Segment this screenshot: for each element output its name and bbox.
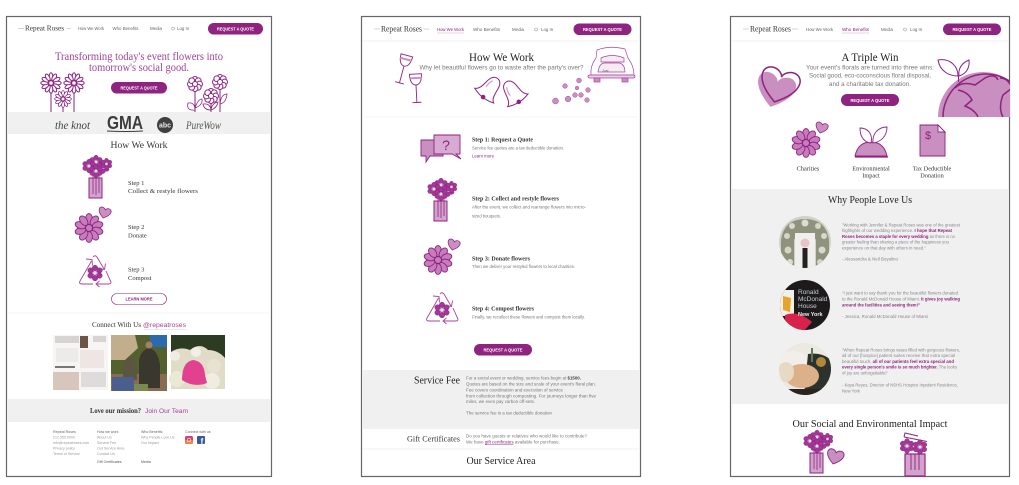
footer links: Service Fee (97, 441, 116, 445)
photo: pink cap on hydrangeas (169, 335, 225, 389)
join our team band: Join Our Team (145, 408, 188, 415)
service fee band: Fee covers coordination and execution of service (466, 388, 564, 392)
step 2 text: Donate (128, 232, 147, 240)
service fee band: Service Fee (414, 374, 460, 386)
step 4 text: Step 4: Compost flowers (472, 306, 535, 312)
testimonial 3: "When Repeat Roses brings vases filled with gorgeous flowers, (842, 348, 960, 352)
navigation bar: Repeat Roses (750, 24, 791, 34)
footer links: Gift Certificates (97, 460, 122, 464)
icon: champagne glasses (394, 54, 423, 103)
navigation bar: Repeat Roses (381, 24, 422, 34)
testimonial 3: - Kaya Reyes, Director of NSHS Hospice Inpatient Residence, (842, 382, 958, 388)
testimonial 3 (842, 348, 960, 394)
heading: why people love us: Why People Love Us (828, 195, 912, 206)
footer links: Why People Love Us (141, 436, 175, 440)
icon: compost (427, 293, 458, 324)
navigation bar: Media (150, 26, 163, 31)
step 3 text (472, 256, 575, 269)
gift certificates row: We have gift certificates available for purchase. (466, 440, 560, 444)
panel: who benefits page (730, 16, 1019, 476)
footer links: Privacy policy (53, 446, 75, 450)
icon: confetti (552, 78, 590, 104)
footer links: 212.555.0000 (53, 436, 75, 440)
icon: facebook (197, 436, 205, 446)
icon: getaway car: Just (602, 69, 608, 73)
press logos band: the knot (55, 118, 91, 132)
heading: social and environmental impact: Our Social and Environmental Impact (792, 419, 948, 430)
photo: ronald mcdonald house: McDonald (798, 296, 828, 303)
testimonial 1: greater feeling than sharing a piece of the happiness you (842, 240, 949, 244)
testimonial 3: every single person's smile is so much brighter. The looks (842, 364, 957, 370)
navigation bar: Media (512, 27, 525, 32)
learn more button: LEARN MORE (126, 296, 153, 302)
step 3 text: Step 3: Donate flowers (472, 256, 531, 262)
testimonials band (731, 189, 1009, 404)
testimonial 3: of joy are unforgettable!" (842, 370, 889, 376)
icon: bouquet in vase (83, 155, 112, 198)
heading: how we work: How We Work (110, 141, 168, 151)
step 4 text (472, 306, 585, 320)
join our team band (7, 399, 271, 422)
photo: flower arrangement (778, 343, 831, 395)
navigation bar: How We Work (806, 27, 834, 32)
icon: getaway car (588, 47, 635, 82)
icon: bouquet in vase (428, 178, 457, 221)
testimonial 3: beautiful touch, all of our patients feel extra special and (842, 359, 955, 364)
icon: sprouting plant (855, 127, 888, 157)
icon: tax document (920, 125, 945, 156)
testimonial 1: Roses becomes a staple for every wedding as there is no (842, 234, 956, 239)
gift certificates row: Gift Certificates (407, 434, 460, 444)
step 3 text: Compost (128, 275, 152, 282)
step 3 text: Then we deliver your restyled flowers to local charities. (472, 264, 575, 269)
footer links (53, 430, 211, 464)
step 2 text (128, 224, 147, 240)
social heading: @repeatroses (143, 322, 187, 329)
hero button (841, 94, 899, 106)
photo: ronald mcdonald house: House (798, 303, 817, 310)
testimonial 2: - Jessica, Ronald McDonald House of Miami (842, 314, 928, 319)
service fee band: miles, we even pay carbon off-sets. (466, 399, 535, 404)
footer links: Our Service Area (97, 446, 124, 450)
icon: wedding bells (473, 71, 530, 110)
footer links: Contact Us (97, 452, 115, 456)
footer links: Connect with us (185, 430, 211, 434)
gift certificates row (407, 434, 588, 444)
win labels: Donation (920, 172, 945, 180)
request quote button (474, 344, 532, 356)
footer links: Media (141, 460, 151, 464)
join our team band: Love our mission? (90, 407, 141, 415)
footer links: info@repeatroses.com (53, 441, 89, 445)
step 1 text: Collect & restyle flowers (128, 188, 198, 195)
footer links: About Us (97, 436, 112, 440)
win labels: Environmental (852, 166, 890, 172)
page heading: and a charitable tax donation. (829, 81, 911, 88)
testimonial 3: all of our [hospice] patient suites receive that extra special (842, 353, 955, 358)
service fee band: from collection through composting. For journeys longer than five (466, 394, 597, 398)
hero heading (55, 51, 223, 74)
icon: speech bubbles (421, 135, 461, 162)
photo: ronald mcdonald house: Ronald (798, 289, 819, 296)
step 2 text: sized bouquets. (472, 214, 501, 218)
step 1 text: Service fee quotes are a tax deductible donation. (472, 146, 564, 150)
icon: bouquet with heart (804, 430, 845, 473)
step 4 text: Finally, we recollect these flowers and compost them locally. (472, 314, 585, 320)
icon: flower with heart (74, 206, 112, 242)
navigation bar: Who Benefits (112, 26, 139, 31)
navigation bar: REQUEST A QUOTE (583, 27, 622, 32)
navigation bar: Log In (541, 27, 554, 32)
heading: our service area: Our Service Area (466, 456, 536, 467)
step 3 text (128, 266, 152, 282)
photo: ronald mcdonald house (780, 280, 830, 332)
icon: compost (80, 256, 111, 287)
icon: flower with heart (423, 238, 461, 274)
step 2 text: Step 2 (128, 224, 144, 231)
step 1 text: Learn more (472, 154, 495, 158)
icon: tax document: $ (925, 130, 931, 142)
service fee band: Quotes are based on the size and scale of your event's floral plan. (466, 382, 596, 386)
learn more button (112, 294, 166, 304)
service fee band: For a social event or wedding, service fees begin at $1500. (466, 376, 581, 380)
step 1 text (128, 180, 198, 195)
footer links: How we work (97, 430, 119, 434)
navigation bar (731, 24, 1009, 41)
page heading (420, 52, 584, 72)
hero heading: tomorrow's social good. (89, 62, 189, 74)
gift certificates row: Do you have guests or relatives who would like to contribute? (466, 434, 588, 438)
page heading: A Triple Win (842, 52, 899, 64)
panel: how we work page (362, 16, 640, 476)
testimonial 1: experience on that day with others in need." (842, 246, 927, 250)
navigation bar: Who Benefits (842, 27, 870, 32)
navigation bar (362, 24, 640, 41)
footer links: Repeat Roses (53, 430, 76, 434)
page heading: Your event's florals are turned into three wins: (806, 64, 934, 72)
icon: speech bubbles: ? (442, 137, 450, 153)
icon: round flowers (188, 74, 228, 112)
testimonial 2: to the Ronald McDonald House of Miami. It gives joy walking (842, 296, 961, 302)
service fee band: The service fee is a tax deductible donation (466, 410, 553, 416)
testimonial 2: "I just want to say thank you for the beautiful flowers donated (842, 290, 959, 296)
step 1 text: Step 1: Request a Quote (472, 138, 533, 144)
icon: instagram (185, 436, 193, 444)
testimonial 2 (842, 290, 961, 319)
win labels: Impact (862, 172, 880, 180)
step 3 text: Step 3 (128, 266, 144, 274)
navigation bar: Log In (177, 26, 190, 31)
navigation bar: REQUEST A QUOTE (952, 27, 992, 32)
navigation bar: Who Benefits (473, 27, 501, 32)
icon: daisies (41, 73, 84, 112)
service fee band (362, 370, 640, 429)
footer links: Who Benefits (141, 430, 163, 434)
page heading: Why let beautiful flowers go to waste after the party's over? (420, 64, 584, 72)
navigation bar: How We Work (437, 27, 465, 32)
press logos band: PureWow (185, 118, 221, 132)
footer links: Our Impact (141, 441, 159, 445)
icon: compost bin with flowers (900, 433, 927, 476)
footer links: Terms of Service (53, 452, 80, 456)
press logos band (7, 112, 271, 134)
photo: couple under floral arch (779, 216, 831, 268)
press logos band: GMA (107, 113, 143, 133)
step 2 text: Step 2: Collect and restyle flowers (472, 196, 560, 202)
page heading (806, 52, 934, 88)
step 2 text: After the event, we collect and rearrange flowers into micro- (472, 204, 587, 210)
press logos band: abc (159, 122, 171, 130)
win labels (797, 166, 951, 180)
request quote button: REQUEST A QUOTE (484, 348, 523, 352)
hero heading: Transforming today's event flowers into (55, 51, 223, 63)
hero button: REQUEST A QUOTE (850, 98, 890, 103)
panel: home page (6, 16, 272, 476)
step 1 text (472, 138, 564, 158)
page heading: Social good, eco-coconscious floral disposal, (809, 72, 931, 80)
page heading: How We Work (469, 52, 534, 64)
navigation bar: Repeat Roses (25, 24, 64, 32)
step 2 text (472, 196, 587, 218)
icon: facebook: f (201, 437, 204, 446)
testimonial 1 (842, 222, 961, 262)
hero button (111, 82, 167, 94)
navigation bar: REQUEST A QUOTE (217, 26, 254, 32)
photo: magazine collage (53, 335, 108, 390)
navigation bar: Media (881, 27, 894, 32)
win labels: Charities (797, 166, 820, 172)
social heading: Connect With Us (92, 321, 141, 329)
navigation bar: Log In (910, 27, 923, 32)
step 1 text: Step 1 (128, 180, 144, 187)
testimonial 3: New York (842, 388, 861, 394)
testimonial 1: - Alessandra & Neil Boyalino (842, 256, 899, 262)
hero button: REQUEST A QUOTE (120, 86, 158, 90)
photo: two people at flower stall (111, 335, 167, 391)
win labels: Tax Deductible (913, 166, 951, 172)
navigation bar (18, 23, 263, 34)
photo: ronald mcdonald house: New York (798, 312, 823, 318)
icon: globe with sprout (937, 59, 1010, 117)
testimonial 1: "Working with Jennifer & Repeat Roses was one of the greatest (842, 222, 961, 228)
testimonial 2: around the facilities and seeing them!" (842, 302, 920, 308)
navigation bar: How We Work (78, 26, 105, 31)
icon: flower with heart (791, 121, 829, 157)
social heading (92, 321, 187, 330)
icon: large heart (752, 65, 802, 112)
testimonial 1: highlights of our wedding experience. I hope that Repeat (842, 228, 953, 233)
